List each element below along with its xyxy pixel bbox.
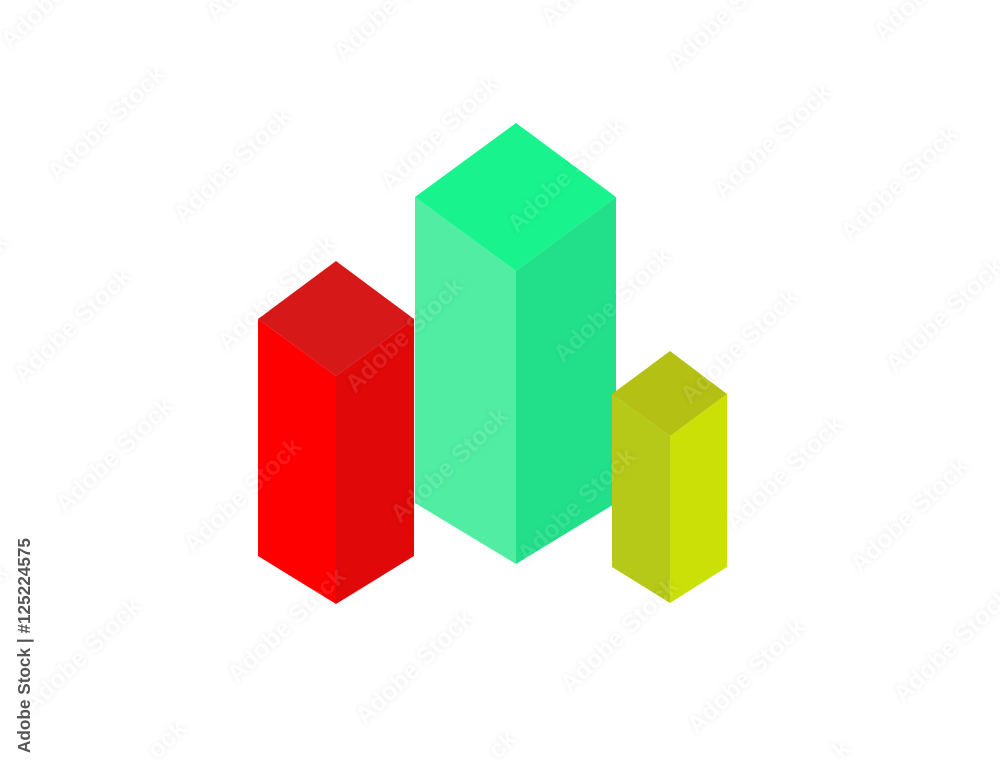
watermark text: Adobe Stock [42,60,171,186]
watermark text: Adobe Stock [720,410,849,536]
watermark text: Adobe Stock [675,283,804,409]
green bar right face [516,197,616,564]
watermark text: Adobe Stock [340,272,469,398]
watermark text: Adobe Stock [502,112,631,238]
watermark text: Adobe Stock [555,572,684,698]
yellow bar top face [612,351,727,436]
watermark text: Adobe Stock [682,613,811,739]
yellow bar [612,351,727,603]
yellow bar left face [612,394,670,603]
red bar right face [336,319,414,604]
watermark text: Adobe Stock [178,432,307,558]
watermark text: Adobe Stock [222,562,351,688]
green bar left face [415,197,516,564]
yellow bar right face [670,394,727,603]
watermark text: ock [142,714,192,764]
red bar top face [258,261,414,376]
green bar [415,123,616,564]
green bar top face [415,123,616,271]
watermark text: Adobe Stock [350,604,479,730]
watermark text: Adobe Stock [18,592,147,718]
watermark text: Adobe Stock [168,102,297,228]
watermark text: Adobe Stock [8,262,137,388]
watermark text: Adobe Stock [385,402,514,528]
red bar [258,261,414,604]
watermark text: Adobe Stock [512,442,641,568]
watermark text: Adobe Stock [375,70,504,196]
watermark text: Adobe Stock [708,78,837,204]
watermark text: Adobe Stock [212,230,341,356]
stock id side label: Adobe Stock | #125224575 [14,538,34,753]
watermark text: Adobe Stock [835,120,964,246]
watermark text: Adobe Stock [845,452,974,578]
watermark text: ck [483,725,522,764]
watermark text: Adobe Stock [50,392,179,518]
watermark text: k [827,734,856,764]
red bar left face [258,319,336,604]
watermark text: Adobe Stock [548,242,677,368]
